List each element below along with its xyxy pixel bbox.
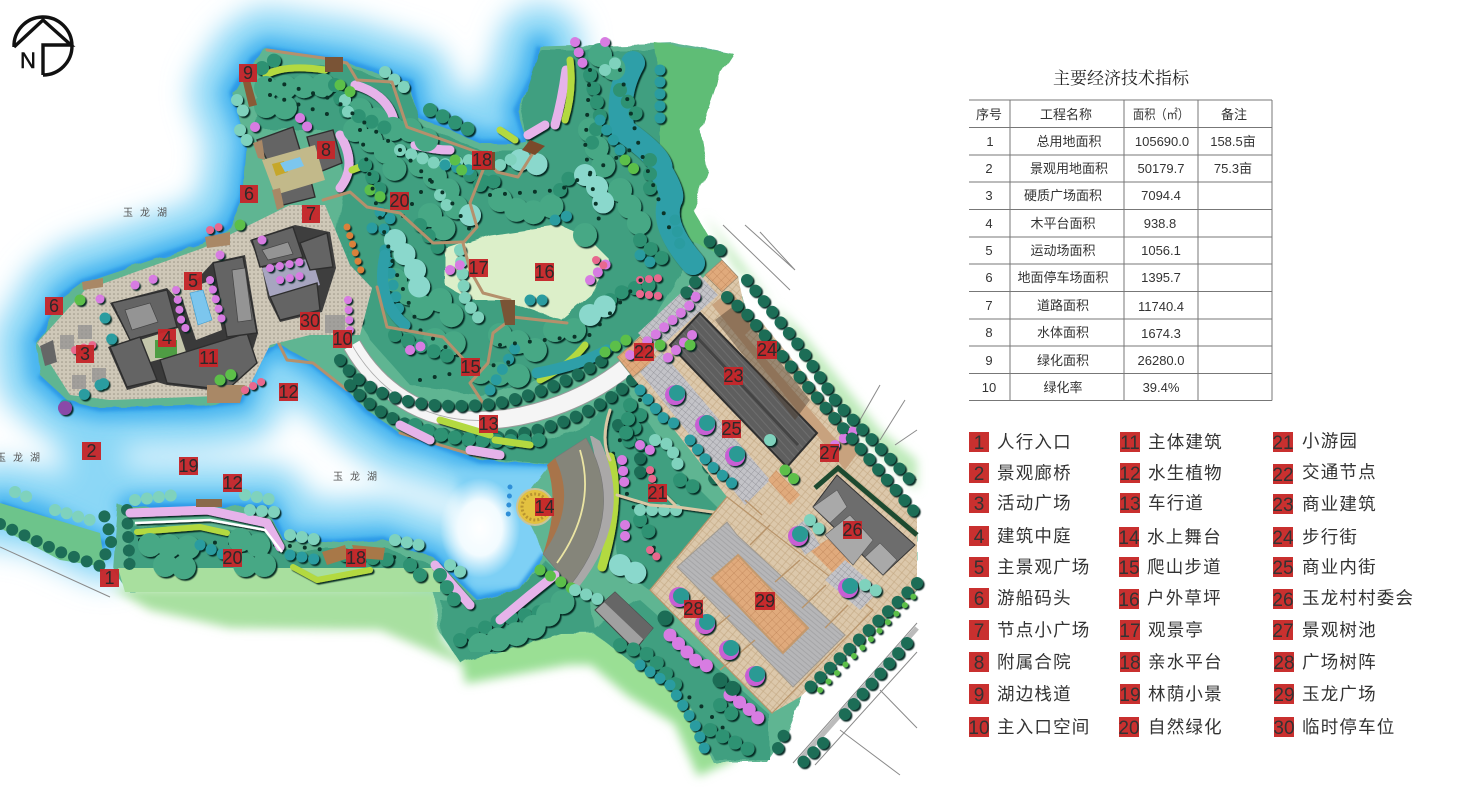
south shore timber decks	[196, 499, 385, 565]
table: economic indicators	[969, 100, 1272, 400]
legend column 2: 16	[1118, 590, 1140, 611]
legend column 3: 27	[1272, 621, 1294, 642]
numbered map markers: 11	[199, 348, 218, 368]
legend column 2: 14	[1118, 528, 1140, 549]
legend column 1: 4	[974, 527, 985, 548]
numbered map markers: 15	[460, 357, 481, 377]
legend column 2: 水上舞台	[1147, 527, 1222, 547]
legend column 2: 11	[1120, 433, 1140, 454]
table: economic indicators: 11740.4	[1138, 299, 1184, 314]
land base	[37, 43, 917, 762]
table: economic indicators: 7	[985, 298, 993, 313]
legend column 1: 9	[974, 685, 984, 706]
dense planting mass	[130, 50, 770, 760]
west complex buildings	[40, 127, 342, 403]
legend column 2: 13	[1119, 494, 1141, 515]
table: economic indicators: 2	[985, 161, 993, 176]
plaza medallion trees	[665, 385, 858, 686]
legend column 1: 2	[974, 464, 984, 485]
legend column 2: 15	[1118, 558, 1140, 579]
numbered map markers: 26	[842, 520, 863, 540]
numbered map markers: 7	[306, 204, 316, 224]
legend column 2: 17	[1119, 621, 1141, 642]
numbered map markers: 9	[243, 63, 253, 83]
main road	[352, 345, 625, 420]
legend column 3: 28	[1273, 653, 1295, 674]
legend column 2: 车行道	[1148, 493, 1204, 513]
table: economic indicators: 备注	[1221, 107, 1247, 122]
numbered map markers: 24	[757, 340, 777, 360]
legend column 1: 5	[974, 558, 984, 579]
legend column 1: 主景观广场	[997, 557, 1090, 577]
numbered map markers: 17	[468, 258, 489, 278]
numbered map markers: 8	[321, 140, 331, 160]
plaza 29	[650, 497, 880, 713]
table: economic indicators: 7094.4	[1141, 188, 1181, 203]
table: economic indicators: 10	[982, 380, 996, 395]
numbered map markers: 5	[188, 271, 198, 291]
lake water halo	[0, 47, 558, 600]
table: economic indicators: 1395.7	[1141, 270, 1181, 285]
legend column 1: 主入口空间	[997, 717, 1090, 737]
numbered map markers: 21	[647, 483, 668, 503]
table: economic indicators: 序号	[976, 107, 1002, 122]
legend	[968, 431, 1414, 739]
legend column 2: 12	[1119, 464, 1141, 485]
legend column 1: 游船码头	[997, 588, 1072, 608]
legend column 2: 观景亭	[1148, 620, 1204, 640]
numbered map markers: 12	[278, 382, 299, 402]
numbered map markers: 27	[819, 443, 840, 463]
surrounding road sketch lines	[0, 225, 917, 775]
numbered map markers: 18	[346, 548, 366, 568]
building: commercial block 23	[670, 305, 817, 467]
numbered map markers: 14	[534, 497, 555, 517]
legend column 2: 亲水平台	[1148, 652, 1223, 672]
legend column 3: 24	[1272, 528, 1294, 549]
legend column 2: 水生植物	[1148, 463, 1223, 483]
numbered map markers: 3	[80, 344, 90, 364]
green landscape fade	[112, 215, 917, 768]
numbered map markers	[45, 63, 863, 619]
park 21 planting	[602, 405, 720, 575]
table: economic indicators: 景观用地面积	[1030, 161, 1108, 176]
table: economic indicators: 75.3亩	[1214, 161, 1252, 176]
legend column 2: 20	[1118, 718, 1140, 739]
legend column 1: 10	[968, 718, 990, 739]
numbered map markers: 6	[244, 184, 254, 204]
lake name labels: 玉龙湖	[333, 470, 384, 483]
numbered map markers: 1	[104, 568, 115, 588]
legend column 3: 临时停车位	[1302, 717, 1396, 737]
table: economic indicators: 6	[985, 270, 993, 285]
west peninsula plaza paving	[37, 205, 372, 400]
legend column 2: 爬山步道	[1147, 557, 1222, 577]
table: economic indicators: 水体面积	[1037, 325, 1089, 340]
table: economic indicators: 绿化率	[1043, 380, 1083, 395]
road side tree rows	[340, 355, 640, 455]
legend column 3: 23	[1272, 495, 1294, 516]
legend column 3: 景观树池	[1302, 620, 1377, 640]
legend column 1: 活动广场	[997, 493, 1072, 513]
legend column 2: 林荫小景	[1148, 684, 1223, 704]
legend column 3: 玉龙广场	[1302, 684, 1377, 704]
table: economic indicators: 8	[985, 325, 993, 340]
numbered map markers: 22	[634, 342, 654, 362]
numbered map markers: 2	[86, 441, 97, 461]
building: village committee 26	[813, 468, 917, 575]
numbered map markers: 18	[472, 150, 492, 170]
legend column 1: 6	[974, 589, 984, 610]
water stage	[508, 436, 614, 588]
legend column 1: 8	[974, 653, 984, 674]
table: economic indicators: 硬质广场面积	[1024, 188, 1102, 203]
table: economic indicators: 26280.0	[1138, 353, 1184, 368]
numbered map markers: 29	[755, 591, 775, 611]
table: economic indicators: 1674.3	[1141, 326, 1181, 341]
legend column 3: 商业建筑	[1302, 494, 1377, 514]
numbered map markers: 30	[300, 311, 320, 331]
walkways	[243, 50, 567, 457]
numbered map markers: 10	[332, 329, 353, 349]
legend column 3: 商业内街	[1302, 557, 1377, 577]
table: economic indicators: 9	[985, 353, 993, 368]
west lake islands	[0, 492, 275, 575]
park planting	[237, 42, 693, 390]
numbered map markers: 20	[222, 548, 243, 568]
numbered map markers: 13	[478, 414, 499, 434]
west paving squares	[60, 315, 345, 389]
legend column 2: 户外草坪	[1147, 588, 1222, 608]
commercial zone paving	[617, 260, 917, 713]
table: economic indicators: 总用地面积	[1036, 134, 1102, 149]
table: economic indicators: 105690.0	[1135, 134, 1189, 149]
legend column 3: 26	[1272, 590, 1294, 611]
table: economic indicators: 4	[985, 216, 993, 231]
table: economic indicators: 50179.7	[1138, 161, 1184, 176]
legend column 3: 广场树阵	[1302, 652, 1377, 672]
legend column 3: 22	[1272, 465, 1294, 486]
legend column 3	[1272, 431, 1414, 739]
legend column 1: 3	[974, 494, 984, 515]
legend column 2: 自然绿化	[1148, 717, 1223, 737]
numbered map markers: 28	[683, 599, 704, 619]
legend column 2: 19	[1119, 685, 1141, 706]
table: economic indicators: 绿化面积	[1037, 353, 1089, 368]
legend column 1: 建筑中庭	[997, 526, 1072, 546]
small building near plaza	[595, 592, 653, 650]
table: economic indicators: 面积（㎡）	[1133, 107, 1189, 122]
legend column 1: 景观廊桥	[997, 463, 1072, 483]
master plan map	[0, 42, 917, 775]
south shore planting	[130, 510, 600, 645]
legend column 2: 主体建筑	[1148, 432, 1223, 452]
south green lawn strip	[118, 568, 440, 592]
table: economic indicators: 3	[985, 188, 993, 203]
commercial street and plaza tree rows	[605, 240, 917, 762]
legend column 3: 29	[1273, 685, 1295, 706]
numbered map markers: 16	[534, 262, 555, 282]
numbered map markers: 12	[222, 473, 243, 493]
table title: 主要经济技术指标	[1053, 69, 1190, 88]
legend column 3: 交通节点	[1302, 462, 1377, 482]
table: economic indicators: 1	[986, 134, 994, 149]
legend column 3: 小游园	[1302, 431, 1358, 451]
legend column 1	[968, 432, 1090, 739]
table: economic indicators: 运动场面积	[1030, 243, 1096, 258]
legend column 1: 1	[974, 433, 984, 454]
central lawn	[445, 225, 610, 320]
numbered map markers: 25	[721, 419, 742, 439]
legend column 3: 30	[1273, 718, 1295, 739]
northeast green slope	[655, 43, 733, 255]
legend column 3: 25	[1272, 558, 1294, 579]
table: economic indicators: 938.8	[1144, 216, 1176, 231]
icon: north arrow compass	[14, 17, 72, 75]
numbered map markers: 4	[162, 328, 172, 348]
table: economic indicators: 5	[985, 243, 993, 258]
legend column 1: 湖边栈道	[997, 684, 1072, 704]
numbered map markers: 23	[723, 366, 744, 386]
legend column 3: 玉龙村村委会	[1302, 588, 1414, 608]
lake name labels	[0, 206, 384, 483]
table: economic indicators: 158.5亩	[1210, 134, 1256, 149]
west complex round trees	[58, 222, 350, 415]
legend column 1: 7	[974, 621, 984, 642]
numbered map markers: 6	[49, 296, 59, 316]
table: economic indicators: 地面停车场面积	[1017, 270, 1109, 285]
lake name labels: 玉龙湖	[123, 206, 174, 219]
legend column 1: 节点小广场	[997, 620, 1090, 640]
table: economic indicators: 工程名称	[1040, 107, 1092, 122]
legend column 1: 附属合院	[997, 652, 1072, 672]
table: economic indicators: 39.4%	[1143, 380, 1180, 395]
numbered map markers: 20	[389, 191, 410, 211]
legend column 3: 步行街	[1302, 527, 1358, 547]
legend column 2: 18	[1119, 653, 1141, 674]
table: economic indicators: 道路面积	[1037, 298, 1089, 313]
tree shadow flecks	[140, 70, 745, 750]
icon: north arrow compass: N	[20, 48, 36, 73]
table: economic indicators: 1056.1	[1141, 243, 1181, 258]
legend column 1: 人行入口	[997, 432, 1072, 452]
table: economic indicators: 木平台面积	[1030, 216, 1096, 231]
numbered map markers: 19	[178, 456, 199, 476]
legend column 3: 21	[1272, 433, 1294, 454]
legend column 2	[1118, 432, 1223, 739]
